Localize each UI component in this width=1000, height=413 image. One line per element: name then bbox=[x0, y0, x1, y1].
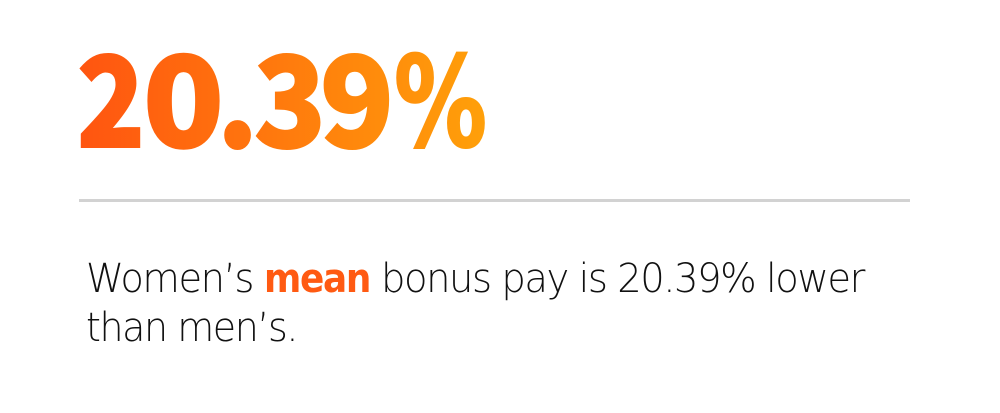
heading: big percentage figure: % bbox=[394, 29, 487, 176]
heading: big percentage figure: 2 bbox=[77, 2, 145, 184]
description text: bonus pay is 20.39% lower bbox=[381, 256, 866, 302]
heading: big percentage figure bbox=[77, 2, 487, 184]
heading: big percentage figure: 3 bbox=[254, 2, 326, 184]
heading: big percentage figure: 0 bbox=[143, 2, 224, 184]
description text: mean bbox=[264, 256, 370, 302]
heading: big percentage figure: . bbox=[217, 2, 258, 184]
description text bbox=[86, 256, 866, 351]
divider line bbox=[79, 199, 910, 202]
heading: big percentage figure: 9 bbox=[320, 2, 394, 184]
description text: than men’s. bbox=[86, 305, 297, 351]
description text: Women’s bbox=[86, 256, 253, 302]
